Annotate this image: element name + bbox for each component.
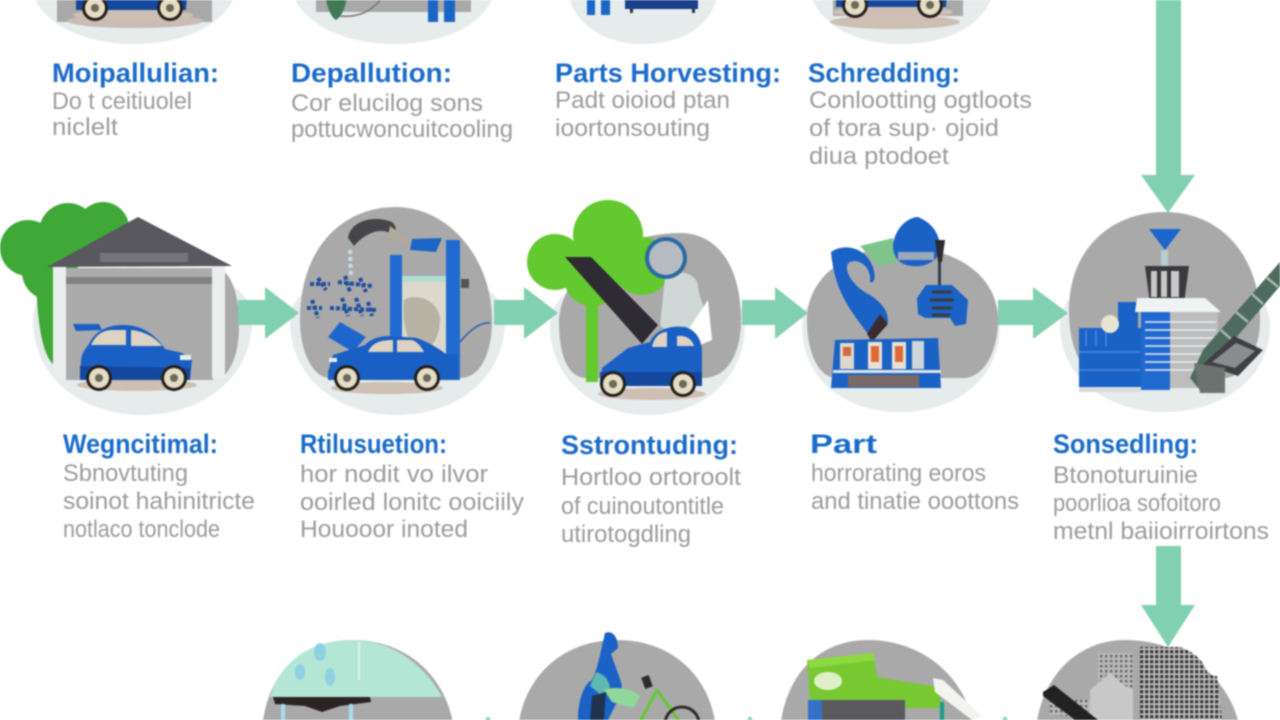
discharge hood (1203, 336, 1263, 376)
icon: lime green machine (807, 653, 943, 708)
text block: Rtilusuetion: hor nodit vo ilvor (300, 461, 488, 488)
panel: parts harvesting illustration (527, 200, 745, 415)
text block: Sstrontuding (561, 430, 741, 548)
arrow: down from top right (1141, 0, 1195, 213)
text block: Sstrontuding: of cuinoutontitle (561, 493, 724, 520)
icon: blue funnel triangle (1149, 229, 1181, 250)
text block: Parts Horvesting: ioortonsouting (555, 115, 710, 142)
panel: top row step 2 illustration (290, 0, 497, 44)
icon: shredder bin (1145, 266, 1189, 303)
text block: Sonsedling: Sonsedling: (1053, 429, 1198, 459)
arrow: step 4 to 5 (998, 287, 1068, 339)
text block: Part: Part (810, 429, 877, 459)
open hood (328, 322, 366, 352)
text block: Depallution: Cor elucilog sons (291, 90, 483, 117)
text block: Schredding: Conlootting ogtloots (809, 87, 1032, 114)
panel: top row step 1 illustration (30, 0, 238, 44)
text block: Sstrontuding: Sstrontuding: (561, 430, 738, 460)
panel: depollution illustration (290, 207, 505, 415)
text block: Rtilusuetion: ooirled lonitc ooiciily (300, 489, 524, 516)
text block: Wegncitimal (63, 429, 255, 543)
text block: Schredding: of tora sup· ojoid (809, 115, 999, 142)
garage door (66, 268, 213, 380)
text block: Schredding (808, 58, 1032, 170)
panel: robot arm illustration (802, 217, 1000, 412)
text block: Depallution (291, 58, 513, 143)
panel: bottom row cyclist (518, 632, 716, 720)
green link (860, 238, 897, 266)
arrow: step 1 to 2 (238, 287, 299, 339)
panel: top row step 3 illustration (565, 0, 720, 44)
text block: Rtilusuetion: Houooor inoted (300, 516, 468, 543)
text block: Schredding: Schredding: (808, 58, 960, 88)
text block: Wegncitimal: Sbnovtuting (63, 460, 188, 487)
text block: Part: and tinatie ooottons (811, 488, 1019, 515)
blue robot arm (831, 247, 888, 340)
panel: bottom row shredded material (1036, 640, 1240, 720)
text block: Part (810, 429, 1019, 515)
icon: hose nozzle (348, 219, 396, 246)
text block: Moipallulian: Do t ceitiuolel (52, 88, 192, 115)
machine interior (402, 276, 446, 358)
icon: blue sedan (328, 336, 458, 394)
icon: blue SUV (598, 327, 706, 400)
blue columns (390, 255, 402, 355)
text block: Parts Horvesting: Parts Horvesting: (555, 58, 781, 88)
icon: blue car (73, 324, 197, 391)
arrow: down to bottom row (1141, 546, 1195, 647)
icon: water drops (295, 643, 335, 686)
text block: Sstrontuding: utirotogdling (561, 521, 691, 548)
dark table (273, 697, 371, 712)
text block: Sonsedling (1053, 429, 1269, 545)
dotted material tower (1140, 647, 1222, 720)
text block: Moipallulian (52, 58, 219, 141)
text block: Schredding: diua ptodoet (809, 143, 949, 170)
icon: green tree behind garage (0, 202, 129, 368)
panel: garage with car (0, 202, 252, 415)
text block: Parts Horvesting (555, 58, 781, 142)
gray backdrop side (222, 270, 239, 378)
text block: Wegncitimal: soinot hahinitricte (63, 488, 255, 515)
arrow: step 3 to 4 (742, 287, 808, 339)
wire (460, 323, 490, 342)
text block: Part: horrorating eoros (811, 460, 986, 487)
blue ring (647, 239, 685, 277)
dark bar (1043, 685, 1098, 720)
text block: Depallution: pottucwoncuitcooling (291, 116, 513, 143)
icon: lime tree (527, 200, 671, 382)
text block: Depallution: Depallution: (291, 58, 452, 88)
text block: Parts Horvesting: Padt oioiod ptan (555, 87, 730, 114)
text block: Sonsedling: Btonoturuinie (1053, 462, 1198, 489)
garage roof (47, 217, 232, 267)
panel: bottom row water table (262, 640, 454, 720)
robot head (893, 217, 940, 266)
text block: Rtilusuetion (300, 429, 524, 543)
dark bar (565, 257, 658, 344)
panel: shredder facility illustration (1060, 212, 1280, 412)
text block: Wegncitimal: notlaco tonclode (63, 516, 220, 543)
text block: Sstrontuding: Hortloo ortoroolt (561, 464, 741, 491)
building (1118, 302, 1138, 342)
arrow: step 2 to 3 (494, 287, 558, 339)
blue machine with panels (831, 338, 941, 388)
text block: Wegncitimal: Wegncitimal: (63, 429, 218, 459)
panel: bottom row lime machine (780, 640, 982, 720)
text block: Sonsedling: metnl baiioirroirtons (1053, 518, 1269, 545)
molecules cluster (307, 276, 376, 318)
panel: top row step 4 illustration (808, 0, 995, 44)
arrow tips: bottom row connectors (485, 716, 1008, 720)
conveyor belt (1190, 262, 1280, 390)
text block: Moipallulian: niclelt (52, 114, 118, 141)
gripper jacket (917, 285, 968, 326)
white debris streak (660, 272, 710, 342)
text block: Sonsedling: poorlioa sofoitoro (1053, 490, 1221, 517)
text block: Rtilusuetion: Rtilusuetion: (300, 429, 447, 459)
text block: Moipallulian: Moipallulian: (52, 58, 219, 88)
icon: cyclist and bicycle (578, 632, 699, 720)
